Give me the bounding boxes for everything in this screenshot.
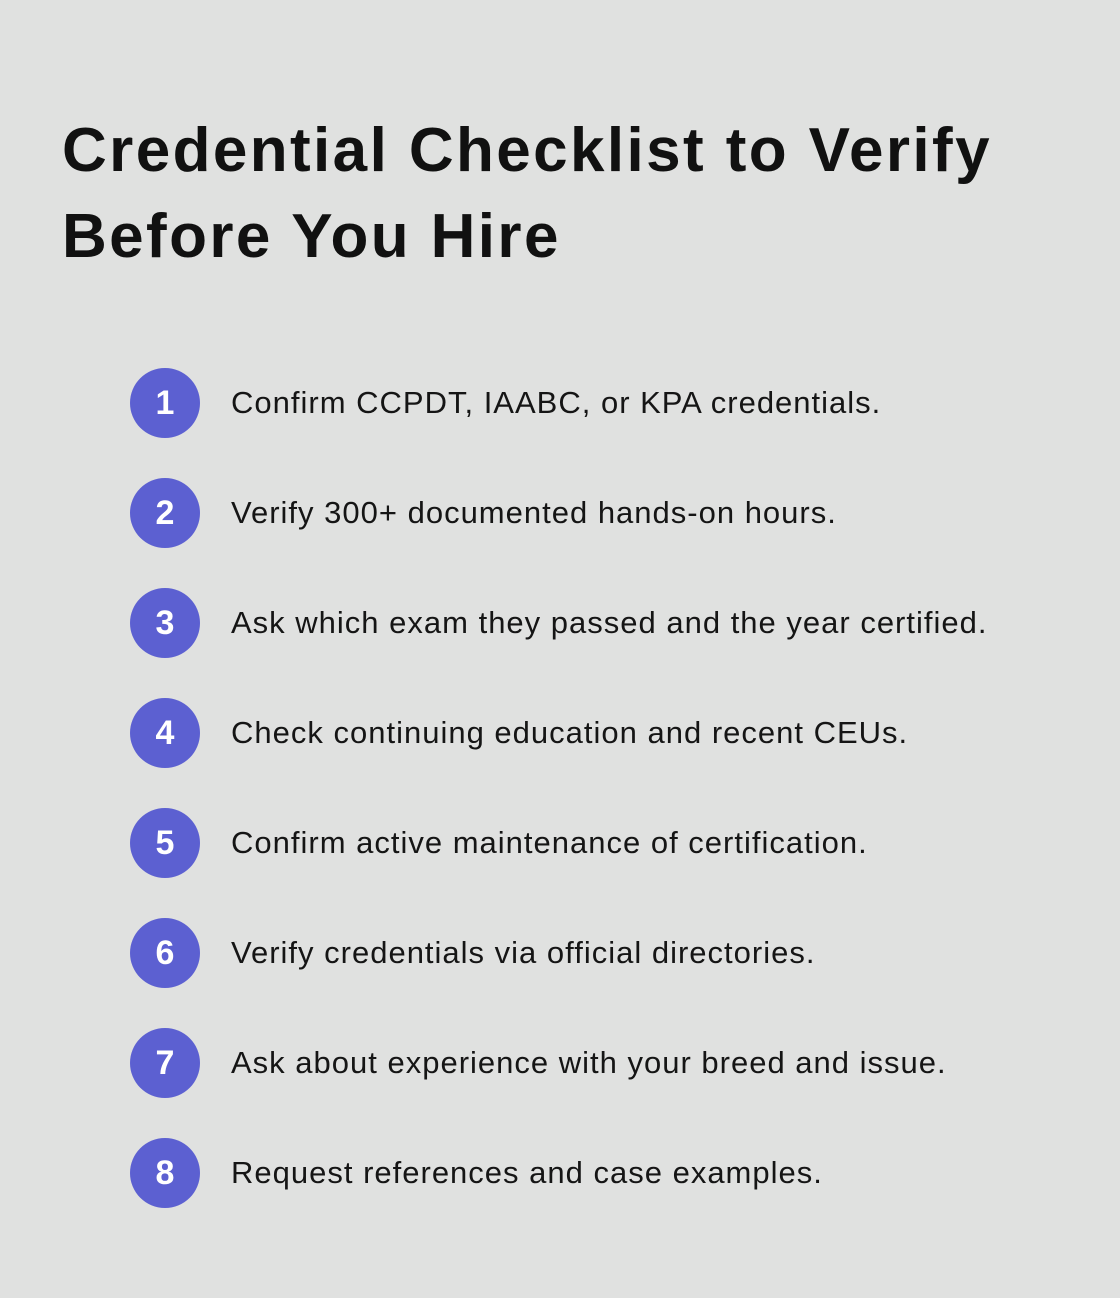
item 1 xyxy=(130,368,881,438)
item 2: 2 xyxy=(156,494,174,532)
item 7: 7 xyxy=(156,1044,174,1082)
title: Credential Checklist to Verify xyxy=(62,116,992,185)
item 5: Confirm active maintenance of certification. xyxy=(231,825,868,860)
item 2: Verify 300+ documented hands-on hours. xyxy=(231,495,837,530)
item 7 xyxy=(130,1028,947,1098)
item 7: Ask about experience with your breed and issue. xyxy=(231,1045,947,1080)
item 6: Verify credentials via official directories. xyxy=(231,935,815,970)
item 6: 6 xyxy=(156,934,174,972)
item 4: 4 xyxy=(156,714,174,752)
item 3: Ask which exam they passed and the year certified. xyxy=(231,605,987,640)
item 6 xyxy=(130,918,815,988)
item 1: 1 xyxy=(156,384,174,422)
item 5: 5 xyxy=(156,824,174,862)
item 3 xyxy=(130,588,987,658)
item 5 xyxy=(130,808,868,878)
item 8 xyxy=(130,1138,823,1208)
item 4: Check continuing education and recent CEUs. xyxy=(231,715,908,750)
title: Before You Hire xyxy=(62,202,561,271)
item 4 xyxy=(130,698,908,768)
item 3: 3 xyxy=(156,604,174,642)
title xyxy=(62,116,992,271)
item 2 xyxy=(130,478,837,548)
item 8: Request references and case examples. xyxy=(231,1155,823,1190)
item 8: 8 xyxy=(156,1154,174,1192)
item 1: Confirm CCPDT, IAABC, or KPA credentials. xyxy=(231,385,881,420)
